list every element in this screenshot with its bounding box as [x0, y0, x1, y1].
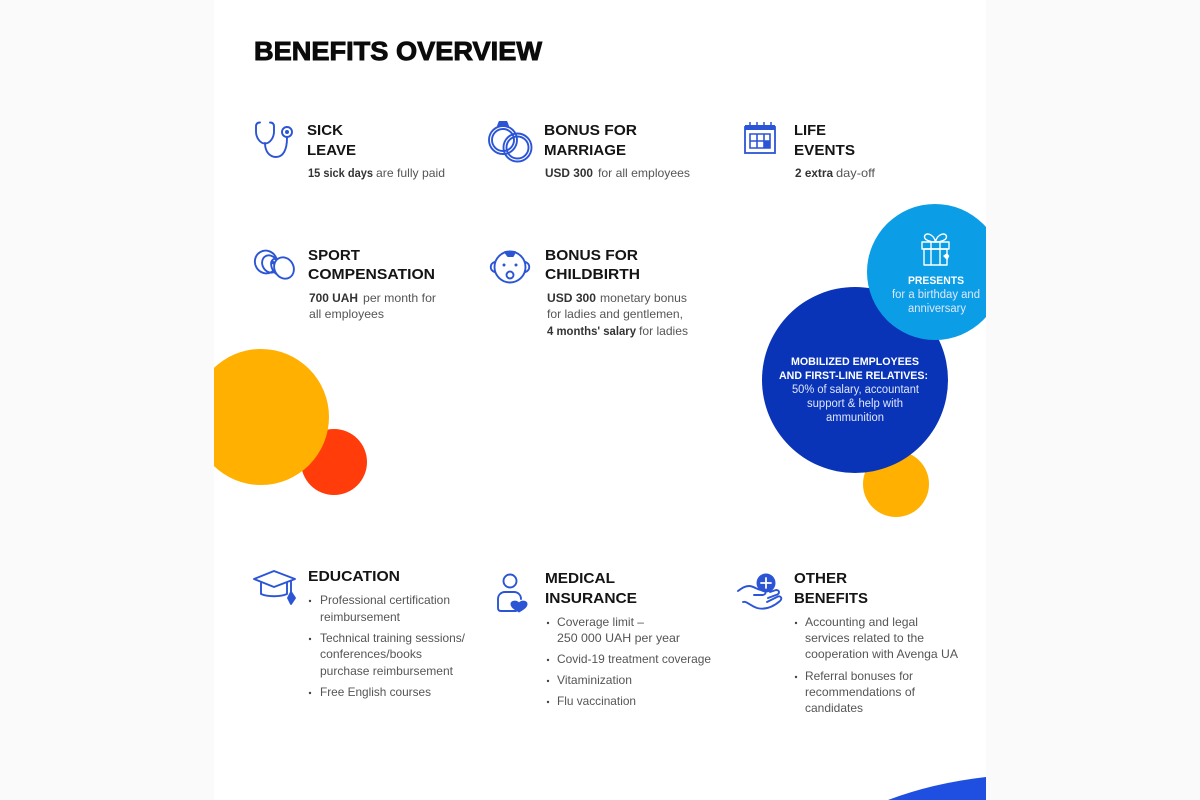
benefit: medical insurance: INSURANCE	[545, 590, 637, 607]
bullet list	[795, 615, 958, 715]
benefit: other benefits: OTHER	[794, 570, 847, 587]
benefit: other benefits	[738, 570, 958, 715]
decorative circle: small yellow	[863, 451, 929, 517]
benefit: life events: EVENTS	[794, 142, 855, 159]
benefit: life events	[745, 122, 876, 180]
callout: presents: anniversary	[908, 303, 966, 315]
callout: mobilized employees: MOBILIZED EMPLOYEES	[791, 356, 919, 368]
benefit: bonus for marriage: BONUS FOR	[544, 122, 637, 139]
benefit: bonus for marriage	[489, 122, 690, 180]
benefit: bonus for childbirth: CHILDBIRTH	[545, 266, 640, 283]
benefit: bonus for marriage: for all employees	[598, 166, 690, 180]
bullet list: candidates	[805, 701, 863, 715]
benefit: sport compensation: SPORT	[308, 247, 360, 264]
benefit: bonus for childbirth: BONUS FOR	[545, 247, 638, 264]
bullet list: Vitaminization	[557, 673, 632, 687]
bullet list: reimbursement	[320, 610, 401, 624]
bullet list: Technical training sessions/	[320, 631, 466, 645]
benefit: other benefits: BENEFITS	[794, 590, 868, 607]
benefit: sport compensation: per month for	[363, 291, 436, 305]
bullet list: conferences/books	[320, 647, 422, 661]
benefit: medical insurance	[498, 570, 711, 708]
benefit: bonus for marriage: MARRIAGE	[544, 142, 626, 159]
benefit: medical insurance: MEDICAL	[545, 570, 615, 587]
bullet list: Coverage limit –	[557, 615, 644, 629]
callout: mobilized employees: ammunition	[826, 412, 884, 424]
bullet list: Free English courses	[320, 685, 431, 699]
icon: hand with plus	[738, 574, 781, 609]
bullet list: services related to the	[805, 631, 924, 645]
callout: mobilized employees: AND FIRST-LINE RELATIVES:	[779, 370, 928, 382]
bullet list	[309, 593, 466, 699]
benefit: bonus for childbirth	[491, 247, 688, 338]
bullet list: cooperation with Avenga UA	[805, 647, 958, 661]
benefit: bonus for childbirth: 4 months' salary	[547, 324, 636, 338]
benefit: bonus for childbirth: for ladies	[639, 324, 688, 338]
title: BENEFITS OVERVIEW	[254, 36, 542, 66]
icon: gift	[922, 234, 949, 265]
benefit: life events: day-off	[836, 166, 876, 180]
white page panel	[214, 0, 986, 800]
benefit: life events: LIFE	[794, 122, 826, 139]
bullet list: Flu vaccination	[557, 694, 636, 708]
benefit: sick leave: LEAVE	[307, 142, 356, 159]
benefit: education: EDUCATION	[308, 568, 400, 585]
benefit: sick leave: are fully paid	[376, 166, 445, 180]
icon: stethoscope	[256, 122, 292, 157]
benefit: sick leave	[256, 122, 445, 180]
bullet list: Covid-19 treatment coverage	[557, 652, 711, 666]
benefit: sick leave: 15 sick days	[308, 166, 373, 180]
bullet list: Professional certification	[320, 593, 450, 607]
callout: mobilized employees	[762, 287, 948, 473]
benefit: bonus for marriage: USD 300	[545, 166, 593, 180]
bullet list: Accounting and legal	[805, 615, 918, 629]
callout: presents: for a birthday and	[892, 289, 980, 301]
benefit: life events: 2 extra	[795, 166, 833, 180]
bullet list	[547, 615, 711, 708]
bullet list: recommendations of	[805, 685, 916, 699]
decorative shape: bottom right arc	[888, 777, 986, 800]
bullet list: Referral bonuses for	[805, 669, 913, 683]
decorative circles: left	[214, 349, 367, 495]
callout: presents	[867, 204, 986, 340]
benefit: bonus for childbirth: monetary bonus	[600, 291, 687, 305]
benefit: sport compensation: 700 UAH	[309, 291, 358, 305]
icon: rings	[489, 122, 532, 162]
callout: presents: PRESENTS	[908, 275, 964, 287]
callout: mobilized employees: support & help with	[807, 398, 903, 410]
benefit: bonus for childbirth: USD 300	[547, 291, 596, 305]
icon: dumbbell	[251, 247, 298, 282]
icon: graduation cap	[254, 571, 295, 604]
icon: person with heart	[498, 574, 527, 612]
benefit: sick leave: SICK	[307, 122, 343, 139]
bullet list: 250 000 UAH per year	[557, 631, 680, 645]
benefit: education	[254, 568, 466, 699]
bullet list: purchase reimbursement	[320, 664, 454, 678]
benefit: sport compensation: COMPENSATION	[308, 266, 435, 283]
benefit: sport compensation	[251, 247, 436, 321]
benefit: sport compensation: all employees	[309, 307, 384, 321]
callout: mobilized employees: 50% of salary, accountant	[792, 384, 920, 396]
icon: calendar	[745, 122, 775, 153]
icon: baby face	[491, 252, 529, 282]
benefit: bonus for childbirth: for ladies and gentlemen,	[547, 307, 683, 321]
